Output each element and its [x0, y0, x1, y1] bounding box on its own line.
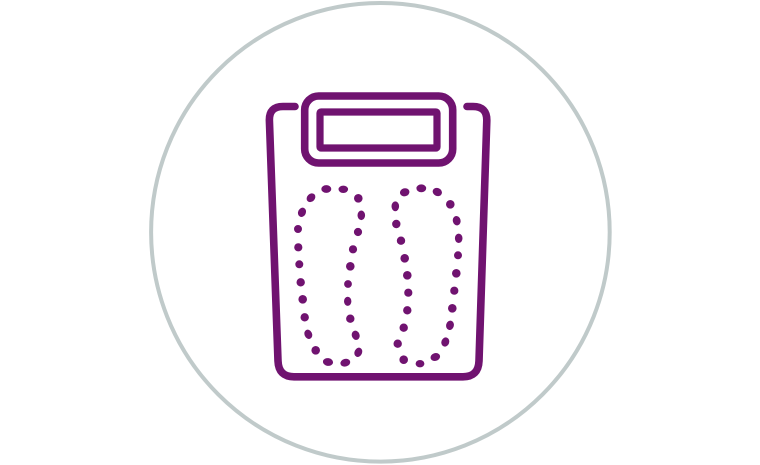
right footprint dotted outline [392, 185, 462, 367]
left footprint dotted outline [294, 186, 365, 367]
scale body [269, 106, 487, 377]
circle outline [151, 3, 610, 462]
display housing [305, 96, 453, 163]
display screen [320, 112, 437, 148]
icon: bathroom scale [269, 96, 487, 377]
